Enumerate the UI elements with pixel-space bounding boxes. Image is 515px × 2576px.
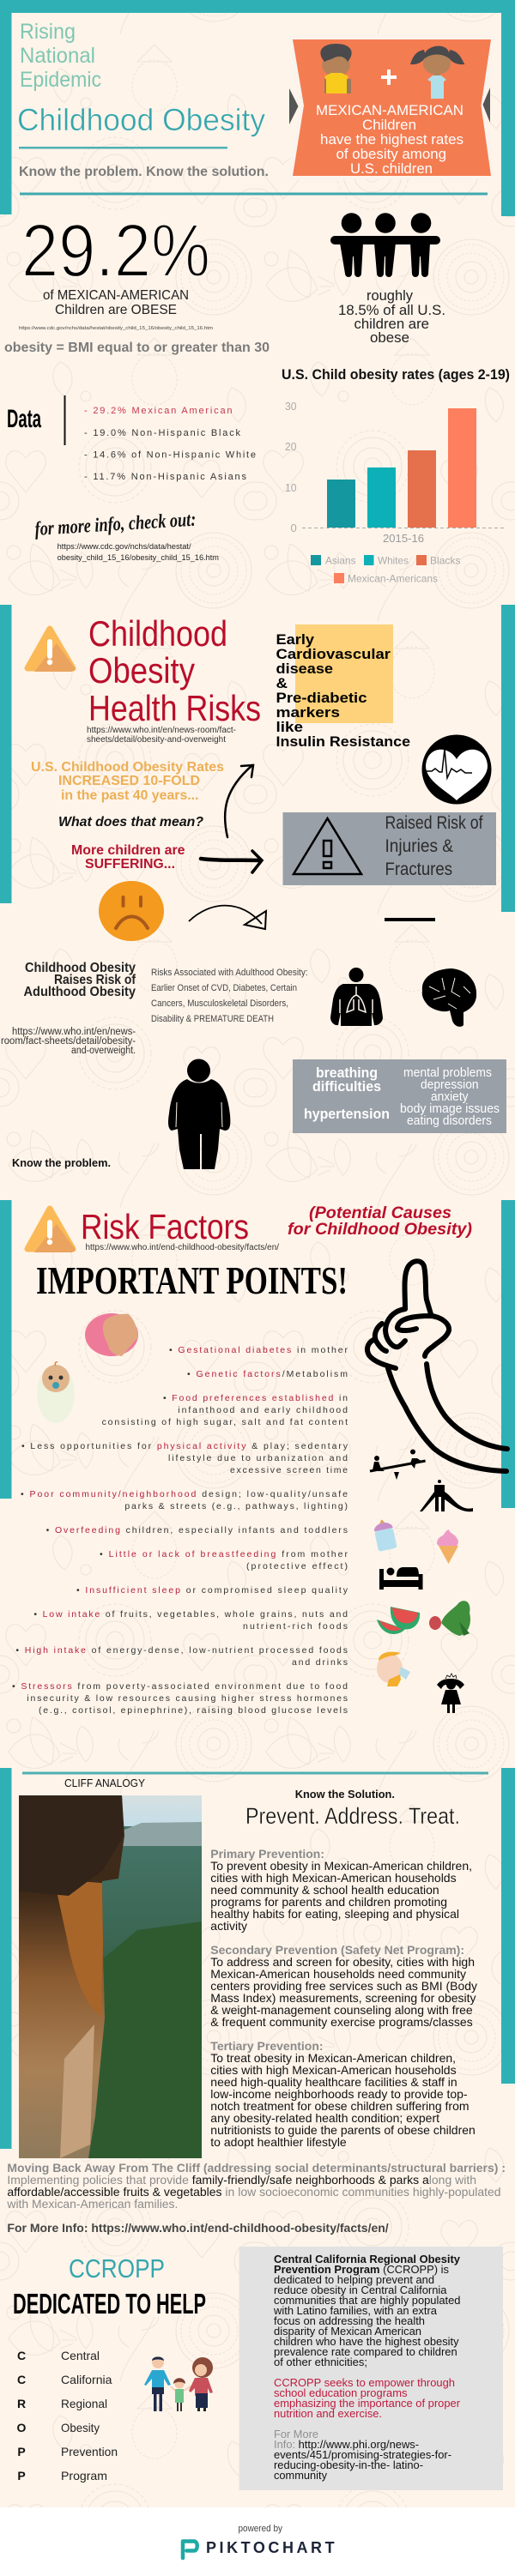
orange stat text: U.S. Childhood Obesity Rates xyxy=(31,760,224,775)
data list xyxy=(84,406,256,482)
bar chart: 20 xyxy=(285,440,297,453)
bar chart: 10 xyxy=(285,481,297,494)
cdc url xyxy=(58,542,219,563)
risk factor list: • Food preferences established in xyxy=(163,1393,348,1403)
who url: https://www.who.int/en/news-room/fact- xyxy=(87,725,236,735)
roughly 18.5% text: roughly xyxy=(367,287,413,304)
cardiovascular text: disease xyxy=(276,661,333,677)
icon: heart with ecg xyxy=(422,734,491,805)
about text: with Latino families, with an extra xyxy=(273,2304,438,2317)
tertiary prevention: To treat obesity in Mexican-American children, xyxy=(210,2051,456,2065)
acronym list: P xyxy=(17,2469,26,2482)
adulthood risks list: Cancers, Musculoskeletal Disorders, xyxy=(151,998,288,1009)
subtitle: potential causes xyxy=(288,1204,472,1239)
icon: baby bottle xyxy=(373,1517,397,1552)
red text: emphasizing the importance of proper xyxy=(274,2397,461,2410)
risk factor list: insecurity & low resources causing higher stress hormones xyxy=(27,1693,348,1704)
title: Childhood Obesity Health Risks: Health Risks xyxy=(88,688,261,728)
banner text: MEXICAN-AMERICAN xyxy=(316,102,464,118)
script heading: for more info: for more info, check out: xyxy=(34,509,197,540)
roughly 18.5% text xyxy=(338,287,445,346)
icon: girl xyxy=(410,46,465,99)
risk factor list: and drinks xyxy=(292,1657,348,1668)
tagline: Know the problem. Know the solution. xyxy=(19,165,269,179)
title: Risk Factors: Risk Factors xyxy=(81,1207,249,1246)
injuries text: Injuries & xyxy=(385,836,453,856)
acronym list: P xyxy=(17,2445,26,2458)
stat: 29.2%: 29.2% xyxy=(21,209,210,293)
bar chart xyxy=(285,400,506,585)
tertiary prevention xyxy=(210,2039,476,2149)
primary prevention: healthy habits for eating, sleeping and physical xyxy=(210,1907,459,1921)
banner text: have the highest rates xyxy=(320,131,464,148)
data list: - 19.0% Non-Hispanic Black xyxy=(84,428,240,438)
icon: watermelon xyxy=(377,1607,420,1634)
red text: CCROPP seeks to empower through xyxy=(274,2376,455,2389)
cdc url: obesity_child_15_16/obesity_child_15_16.htm xyxy=(58,553,219,563)
panel: injuries xyxy=(283,812,496,885)
icon: boy xyxy=(320,44,352,94)
acronym list: C xyxy=(17,2373,26,2386)
heading: prevent address treat: Prevent. Address. Treat. xyxy=(245,1803,460,1829)
definition: obesity = BMI: obesity = BMI equal to or greater than 30 xyxy=(4,341,270,355)
risk factor list xyxy=(12,1345,348,1716)
risk factor list: • Genetic factors/Metabolism xyxy=(187,1369,348,1379)
adulthood heading: Raises Risk of xyxy=(54,973,136,987)
icon: obese person xyxy=(168,1059,230,1169)
icon: plus xyxy=(381,69,397,85)
who url: sheets/detail/obesity-and-overweight xyxy=(87,734,226,745)
heading: Rising National Epidemic: Epidemic xyxy=(20,68,101,92)
adulthood heading: Adulthood Obesity xyxy=(24,985,136,999)
icon: seesaw xyxy=(370,1450,426,1480)
chart legend: Blacks xyxy=(430,554,460,566)
icon: three children xyxy=(330,213,440,277)
banner text: U.S. children xyxy=(350,160,433,177)
secondary prevention: & frequent community exercise programs/classes xyxy=(210,2015,473,2029)
moving back from the cliff: affordable/accessible fruits & vegetables in low socioeconomic communities highly-populated xyxy=(7,2185,501,2199)
secondary prevention: Secondary Prevention (Safety Net Program): xyxy=(210,1943,464,1957)
adulthood risks list: Disability & PREMATURE DEATH xyxy=(151,1014,274,1024)
acronym list: Regional xyxy=(61,2397,107,2410)
arrow: curved down xyxy=(189,906,266,929)
about text: children who have the highest obesity xyxy=(274,2335,459,2348)
red text: nutrition and exercise. xyxy=(274,2407,382,2420)
orange stat text: in the past 40 years... xyxy=(61,788,199,803)
icon: lungs body xyxy=(330,968,383,1026)
adulthood risks list xyxy=(151,968,308,1024)
roughly 18.5% text: children are xyxy=(354,316,429,332)
cardiovascular text: Early xyxy=(276,631,315,648)
icon: family xyxy=(144,2356,213,2411)
link text: reducing-obesity-in-the- latino- xyxy=(274,2458,423,2471)
adulthood risks list: Risks Associated with Adulthood Obesity: xyxy=(151,968,308,978)
cardiovascular text: Pre-diabetic xyxy=(276,690,367,706)
moving back from the cliff: with Mexican-American families. xyxy=(6,2197,178,2211)
cdc url: https://www.cdc.gov/nchs/data/hestat/ xyxy=(58,542,191,552)
secondary prevention: Mexican-American households need community xyxy=(210,1967,466,1981)
chart legend xyxy=(311,554,460,585)
mental conditions: mental problems xyxy=(403,1065,492,1080)
title: Childhood Obesity Health Risks: Obesity xyxy=(88,650,195,691)
secondary prevention: Mass Index) measurements, screening for obesity xyxy=(210,1991,476,2005)
adulthood url: https://www.who.int/en/news- xyxy=(12,1027,136,1037)
bar chart: 30 xyxy=(285,400,297,413)
primary prevention: Primary Prevention: xyxy=(210,1847,324,1861)
acronym list: O xyxy=(17,2421,27,2434)
risk factor list: • Poor community/neighborhood design; low-quality/unsafe xyxy=(21,1489,348,1499)
icon: warning triangle xyxy=(27,629,76,672)
title: Childhood Obesity Health Risks: Childhood xyxy=(88,613,227,654)
acronym list: C xyxy=(17,2349,26,2362)
physical conditions: breathing xyxy=(316,1065,378,1081)
question: What does that mean? xyxy=(58,815,203,830)
icon: person drinking xyxy=(377,1652,410,1686)
risk factor list: excessive screen time xyxy=(230,1465,348,1475)
icon: vegetables xyxy=(429,1601,470,1636)
risk factor list: • Low intake of fruits, vegetables, whole grains, nuts and xyxy=(33,1609,348,1620)
secondary prevention: To address and screen for obesity, cities with high xyxy=(210,1955,475,1969)
icon: stressed woman xyxy=(437,1674,464,1713)
tertiary prevention: cities with high Mexican-American households xyxy=(210,2063,457,2077)
who url xyxy=(87,725,236,745)
footer: powered by: powered by xyxy=(239,2524,282,2534)
red text xyxy=(274,2376,461,2420)
heading: CCROPP: CCROPP xyxy=(69,2253,165,2283)
risk factor list: • Gestational diabetes in mother xyxy=(169,1345,348,1355)
link text: For More xyxy=(274,2428,318,2440)
risk factor list: (protective effect) xyxy=(246,1561,348,1572)
moving back from the cliff: Implementing policies that provide family-friendly/safe neighborhoods & parks along with xyxy=(7,2173,476,2187)
banner text: Children xyxy=(362,117,416,133)
yellow box xyxy=(295,624,393,723)
injuries text: Fractures xyxy=(385,860,452,879)
primary prevention xyxy=(210,1847,472,1933)
orange stat text: INCREASED 10-FOLD xyxy=(58,774,200,788)
mental conditions xyxy=(400,1065,500,1128)
label: cliff analogy: CLIFF ANALOGY xyxy=(64,1777,146,1789)
primary prevention: cities with high Mexican-American households xyxy=(210,1871,457,1885)
orange stat text xyxy=(31,760,224,803)
mental conditions: body image issues xyxy=(400,1101,500,1116)
icon: ice cream xyxy=(437,1529,458,1564)
tertiary prevention: any obesity-related health condition; expert xyxy=(210,2111,439,2125)
tertiary prevention: nutritionists to guide the parents of obese children xyxy=(210,2123,476,2137)
about text: dedicated to helping prevent and xyxy=(274,2273,434,2286)
about text: communities that are highly populated xyxy=(274,2294,460,2307)
cardiovascular text: & xyxy=(276,675,288,691)
risk factor list: • Less opportunities for physical activity & play; sedentary xyxy=(21,1441,348,1451)
about text: disparity of Mexican American xyxy=(274,2325,421,2338)
acronym list: Program xyxy=(61,2469,107,2482)
data list: - 14.6% of Non-Hispanic White xyxy=(84,449,256,460)
roughly 18.5% text: obese xyxy=(370,329,409,346)
mental conditions: depression xyxy=(421,1077,479,1092)
arrow: up xyxy=(225,765,253,837)
subtitle: potential causes: (Potential Causes xyxy=(309,1204,451,1222)
tertiary prevention: need high-quality healthcare facilities & staff in xyxy=(210,2075,457,2089)
primary prevention: activity xyxy=(210,1919,247,1933)
cardiovascular text: Cardiovascular xyxy=(276,646,391,662)
stat caption: Children are OBESE xyxy=(55,303,177,317)
adulthood risks list: Earlier Onset of CVD, Diabetes, Certain xyxy=(151,983,297,993)
cardiovascular text: Insulin Resistance xyxy=(276,733,410,750)
injuries text: Raised Risk of xyxy=(385,813,483,833)
risk url: https://www.who.int/end-childhood-obesity/facts/en/ xyxy=(86,1243,279,1252)
title: Childhood Obesity: Childhood Obesity xyxy=(17,102,265,137)
physical conditions xyxy=(304,1065,390,1122)
source url: https://www.cdc.gov/nchs/data/hestat/obesity_child_15_16/obesity_child_15_16.htm xyxy=(19,326,213,331)
about text: Central California Regional Obesity xyxy=(274,2253,461,2265)
physical conditions: difficulties xyxy=(312,1078,381,1095)
risk factor list: (e.g., cortisol, epinephrine), raising blood glucose levels xyxy=(39,1705,348,1716)
tertiary prevention: low-income neighborhoods ready to provide top- xyxy=(210,2087,468,2101)
adulthood heading: Childhood Obesity xyxy=(25,961,136,975)
acronym list: Obesity xyxy=(61,2421,100,2434)
link text: community xyxy=(274,2469,327,2482)
risk factor list: parks & streets (e.g., pathways, lighting) xyxy=(124,1501,348,1511)
icon: warning triangle risk factors xyxy=(27,1209,76,1252)
arrow: right xyxy=(201,851,262,872)
injuries text xyxy=(385,813,483,879)
icon: gestation xyxy=(85,1313,138,1356)
logo icon xyxy=(183,2541,197,2558)
suffering text xyxy=(71,843,185,872)
heading: Rising National Epidemic: Rising xyxy=(20,20,76,44)
primary prevention: To prevent obesity in Mexican-American children, xyxy=(210,1859,472,1873)
icon: sad face xyxy=(99,881,164,941)
heading: important points: IMPORTANT POINTS! xyxy=(36,1258,348,1302)
icon: slide xyxy=(420,1480,473,1511)
acronym list: California xyxy=(61,2373,112,2386)
chart legend: Mexican-Americans xyxy=(348,573,438,585)
about text: focus on addressing the health xyxy=(274,2314,425,2327)
data list: - 29.2% Mexican American xyxy=(84,406,232,416)
about text: reduce obesity in Central California xyxy=(274,2283,447,2296)
cardiovascular text: like xyxy=(276,719,303,735)
adulthood url: room/fact-sheets/detail/obesity- xyxy=(1,1036,136,1047)
heading: Rising National Epidemic xyxy=(20,20,101,92)
about text xyxy=(273,2253,461,2368)
teal section frame: solution xyxy=(0,1768,515,2149)
icon: baby xyxy=(37,1362,75,1423)
suffering text: SUFFERING... xyxy=(85,857,175,872)
about text: Prevention Program (CCROPP) is xyxy=(274,2263,449,2276)
title: Childhood Obesity Health Risks xyxy=(88,613,261,728)
heading: dedicated to help: DEDICATED TO HELP xyxy=(13,2288,206,2320)
roughly 18.5% text: 18.5% of all U.S. xyxy=(338,302,445,318)
link text: Info: http://www.phi.org/news- xyxy=(274,2438,419,2451)
risk factor list: infanthood and early childhood xyxy=(178,1405,348,1415)
Data heading: Data xyxy=(7,405,41,433)
about text: prevalence rate compared to children xyxy=(274,2345,457,2358)
secondary prevention: & weight-management counseling along with free xyxy=(210,2003,473,2017)
suffering text: More children are xyxy=(71,843,185,858)
bar chart: 0 xyxy=(290,522,297,534)
primary prevention: need community & school health education xyxy=(210,1883,439,1897)
secondary prevention: centers providing free services such as BMI (Body xyxy=(210,1979,477,1993)
know the solution: Know the Solution. xyxy=(295,1788,395,1801)
moving back from the cliff: Moving Back Away From The Cliff (addressing social determinants/structural barriers) : xyxy=(7,2161,506,2175)
photo: cliff xyxy=(19,1795,202,2158)
risk factor list: • High intake of energy-dense, low-nutrient processed foods xyxy=(15,1645,348,1656)
tertiary prevention: to adopt healthier lifestyle xyxy=(210,2135,347,2149)
adulthood url xyxy=(1,1027,136,1056)
acronym list: R xyxy=(17,2397,26,2410)
panel: about CCROPP xyxy=(239,2247,503,2490)
cardiovascular text: markers xyxy=(276,704,340,721)
stat caption xyxy=(43,288,189,317)
teal section frame: header xyxy=(0,0,515,216)
acronym list: Central xyxy=(61,2349,100,2362)
teal section frame: health risks xyxy=(0,605,515,912)
link text xyxy=(274,2428,451,2482)
teal section frame: risk factors xyxy=(0,1200,515,1508)
risk factor list: • Stressors from poverty-associated environment due to food xyxy=(12,1681,348,1692)
moving back from the cliff xyxy=(6,2161,506,2211)
know the problem: Know the problem. xyxy=(12,1156,111,1169)
primary prevention: programs for parents and children promoting xyxy=(210,1895,447,1909)
mental conditions: eating disorders xyxy=(407,1113,492,1128)
risk factor list: nutrient-rich foods xyxy=(243,1621,348,1632)
risk factor list: consisting of high sugar, salt and fat content xyxy=(102,1417,348,1427)
icon: bed xyxy=(379,1567,422,1590)
heading: Rising National Epidemic: National xyxy=(20,44,95,68)
data list: - 11.7% Non-Hispanic Asians xyxy=(84,472,247,482)
banner text: of obesity among xyxy=(336,146,446,162)
tertiary prevention: Tertiary Prevention: xyxy=(210,2039,324,2053)
banner text xyxy=(316,102,464,177)
risk factor list: • Insufficient sleep or compromised sleep quality xyxy=(76,1585,348,1596)
tertiary prevention: notch treatment for obese children suffering from xyxy=(210,2099,470,2113)
more info link: For More Info: https://www.who.int/end-childhood-obesity/facts/en/ xyxy=(7,2221,389,2235)
stat caption: of MEXICAN-AMERICAN xyxy=(43,288,189,303)
icon: pointing finger xyxy=(367,1261,507,1471)
chart legend: Whites xyxy=(378,554,409,566)
panel: conditions xyxy=(293,1059,506,1133)
link text: events/451/promising-strategies-for- xyxy=(274,2448,451,2461)
adulthood heading xyxy=(24,961,136,999)
physical conditions: hypertension xyxy=(304,1106,390,1122)
bar chart: 2015-16 xyxy=(383,532,424,545)
risk factor list: lifestyle due to urbanization and xyxy=(168,1453,348,1463)
chart legend: Asians xyxy=(325,554,355,566)
acronym list xyxy=(17,2349,118,2482)
icon: hazard triangle xyxy=(294,818,361,874)
cardiovascular text xyxy=(276,631,410,750)
risk factor list: • Overfeeding children, especially infants and toddlers xyxy=(46,1525,348,1535)
mental conditions: anxiety xyxy=(431,1089,469,1104)
icon: brain xyxy=(422,968,476,1027)
subtitle: potential causes: for Childhood Obesity) xyxy=(288,1221,472,1239)
adulthood url: and-overweight. xyxy=(71,1046,136,1056)
red text: school education programs xyxy=(274,2386,408,2399)
secondary prevention xyxy=(210,1943,477,2029)
logo wordmark: PIKTOCHART xyxy=(206,2539,335,2556)
about text: of other ethnicities; xyxy=(274,2356,367,2368)
risk factor list: • Little or lack of breastfeeding from mother xyxy=(100,1549,348,1559)
acronym list: Prevention xyxy=(61,2445,118,2458)
